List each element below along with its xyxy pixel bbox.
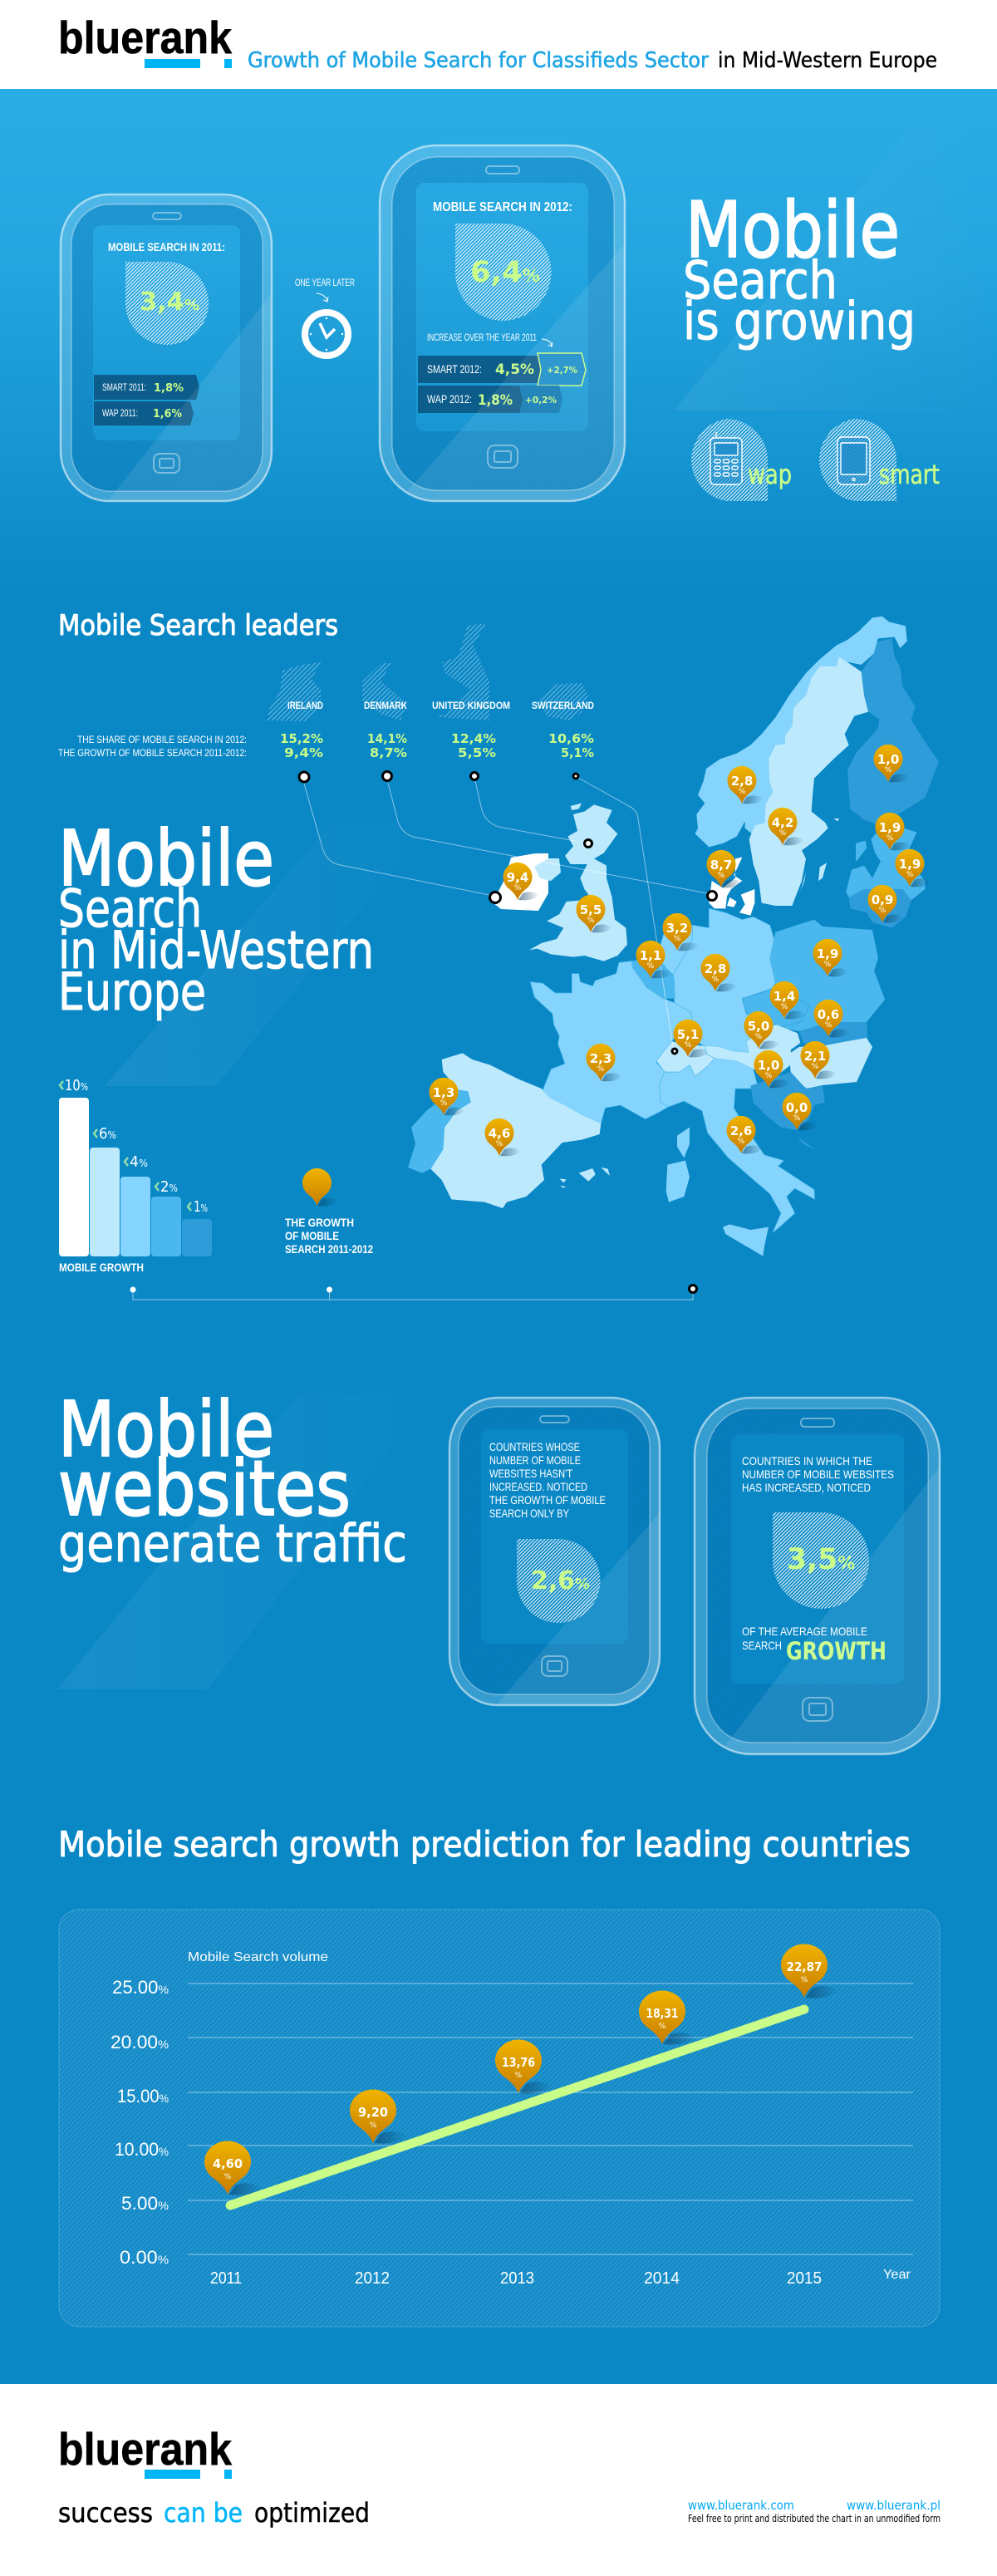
bar: wap 2012: WAP 2012: — [427, 392, 472, 406]
pin 5,5 UK — [577, 895, 612, 932]
bar 6% — [90, 1125, 120, 1256]
pin 4,60: % — [224, 2173, 232, 2181]
pin 22,87: 22,87 — [786, 1959, 823, 1974]
phone text: HAS INCREASED, NOTICED — [742, 1481, 871, 1494]
phone text bottom: OF THE AVERAGE MOBILE — [742, 1625, 867, 1638]
pin 1,0 Hungary: 1,0 — [758, 1058, 779, 1073]
heading: Mobile Search is growing: is growing — [683, 291, 916, 351]
pin 9,4 Ireland: % — [514, 884, 522, 892]
bar 1%: 1% — [194, 1198, 208, 1216]
pin 1,9 Latvia — [896, 849, 931, 887]
x axis labels: 2013 — [500, 2269, 534, 2288]
phone text bottom — [742, 1625, 886, 1665]
chart pins — [204, 1944, 839, 2195]
France — [530, 961, 692, 1123]
pin 4,60: 4,60 — [213, 2156, 243, 2171]
Swedish islands — [800, 819, 839, 892]
heading: Mobile Search in Mid-Western Europe: Search — [58, 878, 202, 939]
heading: Mobile Search in Mid-Western Europe — [58, 814, 374, 1022]
Latvia — [846, 858, 925, 900]
pin 0,9 Lithuania — [867, 885, 904, 922]
pin 2,1 Romania — [801, 1041, 837, 1079]
x axis labels: 2014 — [644, 2269, 680, 2288]
pin 1,0 Hungary: % — [765, 1072, 773, 1080]
Norway — [695, 617, 907, 847]
pin 1,1 Belgium: 1,1 — [640, 948, 661, 963]
values: Ireland: 15,2% — [280, 731, 323, 746]
pin 0,9 Lithuania: % — [879, 907, 886, 915]
pin 2,8 Germany: % — [712, 976, 720, 984]
heading: MOBILE SEARCH IN 2011: — [108, 240, 225, 253]
country names — [287, 700, 594, 711]
icon: smartphone — [837, 437, 870, 484]
pin 9,20: 9,20 — [358, 2105, 388, 2120]
bar: wap 2012: 1,8% — [478, 392, 513, 409]
hatched country: Switzerland — [539, 683, 588, 720]
heading: Mobile Search in Mid-Western Europe: in Mid-Western — [58, 920, 374, 981]
phone text: THE GROWTH OF MOBILE — [489, 1493, 606, 1507]
pin 22,87: % — [801, 1976, 808, 1984]
chart title: Mobile Search volume — [188, 1950, 328, 1964]
United Kingdom — [529, 804, 627, 961]
pin 9,20 — [350, 2089, 408, 2144]
sheen on phone — [397, 241, 627, 503]
pin 1,9 Estonia: 1,9 — [879, 820, 901, 835]
phone text: INCREASED. NOTICED — [489, 1480, 587, 1493]
phone text: COUNTRIES WHOSE — [489, 1440, 580, 1453]
pin 5,1 Switzerland: % — [685, 1041, 692, 1050]
values: United Kingdom: 12,4% — [451, 731, 496, 746]
pin 8,7 Denmark: 8,7 — [710, 858, 732, 873]
leader dots — [299, 771, 716, 1054]
links: www.bluerank.com — [688, 2498, 794, 2513]
Poland — [770, 920, 885, 1031]
sheen on phone — [716, 1463, 943, 1757]
tagline: can be — [164, 2497, 243, 2529]
values: Denmark: 8,7% — [370, 745, 407, 760]
pin 0,6 Slovakia: % — [825, 1021, 832, 1030]
values: Switzerland: 10,6% — [548, 731, 594, 746]
Slovakia — [799, 1022, 867, 1045]
phone text: COUNTRIES IN WHICH THE — [742, 1454, 872, 1467]
y axis labels — [111, 1977, 169, 2268]
Romania — [789, 1038, 872, 1089]
value 3,4%: 3,4% — [140, 288, 199, 317]
connector lines: leaders to map — [304, 778, 707, 1047]
x axis labels: 2015 — [787, 2269, 822, 2288]
main title: in Mid-Western Europe — [718, 48, 937, 73]
icon: wap phone — [710, 432, 742, 484]
Northern Ireland — [534, 858, 561, 881]
value 6,4%: 6,4% — [470, 256, 540, 289]
pin 8,7 Denmark — [706, 850, 743, 887]
values: United Kingdom — [451, 731, 496, 760]
Finland — [847, 638, 939, 825]
pin 8,7 Denmark: % — [718, 872, 725, 880]
pin 4,6 Spain: 4,6 — [489, 1126, 510, 1141]
values: Switzerland — [548, 731, 594, 760]
pin 4,2 Sweden — [768, 808, 804, 845]
axis label: MOBILE GROWTH — [59, 1261, 144, 1274]
Sardinia — [666, 1161, 690, 1202]
values: Switzerland: 5,1% — [561, 745, 594, 760]
leaders table — [58, 623, 594, 760]
label smart: smart — [879, 459, 940, 490]
legend text — [285, 1216, 373, 1256]
pin 9,20: % — [370, 2121, 377, 2130]
country names: IRELAND — [287, 700, 323, 711]
pin 4,60 — [204, 2141, 263, 2195]
trend line — [230, 2009, 804, 2205]
heading: MOBILE SEARCH IN 2012: — [433, 200, 572, 214]
phone: no mobile website growth — [449, 1398, 662, 1708]
tagline: optimized — [254, 2497, 370, 2529]
hatched teardrop — [125, 262, 209, 345]
pin 1,4 Czech Republic: % — [781, 1003, 788, 1011]
values: United Kingdom: 5,5% — [458, 745, 496, 760]
logo: bluerank: bluerank — [58, 12, 232, 63]
row labels — [58, 734, 247, 759]
heading: Mobile websites generate traffic: generate traffic — [58, 1513, 407, 1574]
pin 1,3 Portugal: 1,3 — [433, 1085, 454, 1100]
panel: line chart — [59, 1910, 940, 2327]
northern countries — [529, 617, 939, 961]
hatched teardrop — [773, 1512, 869, 1609]
pin 13,76: % — [515, 2072, 523, 2080]
Lithuania — [849, 889, 911, 928]
pin 5,5 UK: 5,5 — [580, 902, 602, 917]
Czech Republic — [742, 989, 810, 1028]
pin 2,6 Italy: % — [738, 1138, 745, 1146]
Denmark — [709, 858, 754, 916]
Switzerland — [656, 1041, 715, 1076]
pin 3,2 Netherlands — [663, 913, 699, 951]
sheen on phone — [106, 293, 274, 503]
bar: wap 2011: 1,6% — [153, 408, 182, 420]
legend text: SEARCH 2011-2012 — [285, 1242, 373, 1256]
pin 22,87 — [781, 1944, 839, 1998]
Scottish islands — [571, 804, 582, 810]
pin 9,4 Ireland: 9,4 — [507, 870, 528, 885]
legend pin: growth of mobile search — [285, 1168, 373, 1256]
phone text bottom: GROWTH — [786, 1637, 886, 1665]
pin 2,6 Italy — [726, 1116, 763, 1153]
pin 2,8 Germany — [701, 954, 737, 991]
legend text: THE GROWTH — [285, 1216, 354, 1229]
country names: SWITZERLAND — [532, 700, 594, 711]
pin 4,2 Sweden: 4,2 — [772, 815, 793, 830]
row labels: THE GROWTH OF MOBILE SEARCH 2011-2012: — [58, 747, 247, 759]
pin 0,6 Slovakia — [814, 1000, 850, 1037]
phone text: NUMBER OF MOBILE WEBSITES — [742, 1467, 894, 1481]
pin 3,2 Netherlands: 3,2 — [666, 921, 688, 936]
y axis labels: 25.00% — [112, 1977, 169, 1998]
pin 5,0 Austria: 5,0 — [748, 1019, 769, 1034]
bar 2% — [151, 1178, 181, 1256]
x axis labels: 2012 — [355, 2269, 390, 2288]
pin 5,1 Switzerland: 5,1 — [677, 1027, 699, 1042]
bar: smart 2012: +2,7% — [547, 365, 577, 376]
phone text bottom: SEARCH — [742, 1639, 782, 1652]
bar 4%: 4% — [130, 1153, 148, 1171]
increase label: INCREASE OVER THE YEAR 2011 — [427, 332, 537, 343]
tagline: success — [58, 2497, 153, 2529]
pin 5,0 Austria — [744, 1011, 780, 1049]
sheen: section 3 — [57, 1394, 432, 1689]
pin 1,1 Belgium: % — [647, 962, 655, 971]
heading: Mobile Search is growing — [683, 185, 916, 351]
pin 2,3 France: % — [597, 1065, 605, 1074]
pin 1,9 Estonia — [876, 813, 911, 850]
pin 1,4 Czech Republic: 1,4 — [774, 989, 795, 1004]
pin 1,9 Latvia: 1,9 — [899, 857, 921, 872]
pin 1,3 Portugal — [429, 1078, 465, 1115]
pin 13,76 — [495, 2039, 553, 2094]
row labels: THE SHARE OF MOBILE SEARCH IN 2012: — [77, 734, 247, 745]
phone text: WEBSITES HASN'T — [489, 1467, 572, 1480]
Corsica — [677, 1128, 690, 1158]
pin 1,0 Hungary — [754, 1050, 790, 1088]
legend: smart — [819, 419, 940, 501]
arrow: one year later — [317, 293, 328, 302]
pin 0,0 Greece: % — [793, 1114, 801, 1123]
heading: Mobile websites generate traffic — [58, 1385, 407, 1574]
x axis labels: 2011 — [210, 2269, 242, 2288]
phone text: NUMBER OF MOBILE — [489, 1453, 581, 1467]
hatched country: Ireland — [267, 662, 321, 721]
bar: wap 2011 — [94, 401, 194, 425]
phone: mobile search in 2012 — [380, 145, 627, 503]
Balkans and Greece — [750, 1072, 825, 1149]
heading: growth prediction: Mobile search growth prediction for leading countries — [58, 1824, 911, 1865]
heading: Mobile Search is growing: Search — [683, 250, 837, 311]
Netherlands — [656, 925, 692, 975]
bar: smart 2011: 1,8% — [154, 382, 184, 395]
footer — [0, 2384, 997, 2576]
Germany — [673, 908, 775, 1053]
sheen: heading section 1 — [674, 129, 997, 410]
bar 1% — [182, 1198, 212, 1256]
main title: Growth of Mobile Search for Classifieds Sector — [248, 48, 709, 73]
pin 1,0 Finland — [874, 745, 910, 782]
hatched country: United Kingdom — [439, 623, 489, 720]
bar: wap 2012 — [418, 386, 562, 413]
tagline — [58, 2497, 370, 2529]
bar: smart 2012 — [418, 353, 586, 386]
pin 1,0 Finland: 1,0 — [877, 752, 899, 767]
one year later label: ONE YEAR LATER — [295, 277, 355, 288]
links: www.bluerank.pl — [847, 2498, 941, 2513]
bar 10%: 10% — [65, 1077, 88, 1094]
pin 0,0 Greece: 0,0 — [786, 1100, 808, 1115]
phone text — [742, 1454, 894, 1494]
y axis labels: 20.00% — [111, 2032, 169, 2052]
values: Denmark — [367, 731, 407, 760]
pin 2,8 Norway — [728, 766, 764, 804]
y axis labels: 5.00% — [121, 2193, 169, 2214]
hatched teardrop — [455, 224, 552, 321]
pin 3,2 Netherlands: % — [674, 935, 681, 943]
bar: smart 2011 — [94, 375, 199, 400]
pin 1,3 Portugal: % — [440, 1099, 448, 1108]
y axis labels: 15.00% — [117, 2086, 169, 2107]
pin 4,6 Spain: % — [496, 1140, 503, 1148]
Belgium — [631, 956, 675, 999]
hatched teardrop — [517, 1539, 600, 1623]
values: Denmark: 14,1% — [367, 731, 407, 746]
map pins — [429, 745, 931, 1156]
pin 0,0 Greece — [783, 1093, 818, 1130]
Sicily — [723, 1224, 769, 1256]
pin 5,1 Switzerland — [673, 1020, 710, 1057]
pin 4,2 Sweden: % — [779, 829, 787, 838]
bar: wap 2012: +0,2% — [525, 395, 557, 406]
Austria and Hungary — [705, 1025, 800, 1074]
Estonia — [856, 828, 916, 862]
x axis labels — [210, 2268, 911, 2288]
Spain — [430, 1053, 601, 1208]
pin 1,9 Poland: 1,9 — [817, 946, 838, 961]
pin 2,6 Italy: 2,6 — [730, 1123, 752, 1138]
pin 1,9 Latvia: % — [906, 871, 914, 879]
links — [688, 2498, 941, 2513]
pin 5,0 Austria: % — [755, 1033, 763, 1041]
bar: wap 2011: WAP 2011: — [102, 407, 138, 419]
pin 2,1 Romania: % — [812, 1063, 819, 1071]
y axis labels: 0.00% — [120, 2247, 169, 2268]
pin 4,6 Spain — [485, 1118, 521, 1156]
bar 10% — [59, 1077, 89, 1256]
hatched country: Denmark — [362, 663, 407, 720]
bar: smart 2012: SMART 2012: — [427, 362, 482, 376]
sheen: section 2 — [105, 823, 432, 1086]
Portugal — [408, 1090, 471, 1173]
bar 6%: 6% — [99, 1125, 116, 1143]
pin 13,76: 13,76 — [502, 2055, 535, 2070]
pin 1,4 Czech Republic — [769, 981, 806, 1019]
phone text: SEARCH ONLY BY — [489, 1507, 570, 1520]
value 2,6%: 2,6% — [531, 1566, 590, 1595]
sheen on phone — [494, 1512, 662, 1708]
heading: Mobile Search is growing: Mobile — [685, 185, 900, 275]
pin 0,6 Slovakia: 0,6 — [818, 1007, 839, 1022]
header — [58, 12, 937, 73]
arrow: increase — [542, 339, 553, 347]
pin 1,9 Poland: % — [824, 961, 832, 969]
map of Europe — [408, 617, 939, 1256]
Sweden — [749, 656, 868, 906]
pin 2,8 Germany: 2,8 — [705, 961, 726, 976]
x axis labels: Year — [883, 2268, 911, 2282]
label wap: wap — [748, 459, 792, 490]
phone: mobile website growth — [695, 1398, 943, 1757]
country names: UNITED KINGDOM — [432, 700, 510, 711]
pin 18,31: 18,31 — [646, 2006, 678, 2021]
bar 4% — [120, 1153, 150, 1256]
Ireland — [493, 853, 548, 911]
phone: mobile search in 2011 — [61, 194, 274, 503]
pin 1,1 Belgium — [636, 941, 672, 978]
heading: Mobile websites generate traffic: websites — [58, 1444, 351, 1533]
icon: clock — [305, 312, 348, 356]
pin 18,31: % — [659, 2023, 666, 2031]
bar chart: mobile growth — [59, 1077, 212, 1274]
heading: Mobile Search leaders: Mobile Search leaders — [58, 609, 338, 642]
bar: smart 2012: 4,5% — [495, 361, 534, 378]
pin 2,8 Norway: % — [739, 788, 746, 796]
heading: Mobile Search in Mid-Western Europe: Mobile — [58, 814, 274, 903]
heading: Mobile Search in Mid-Western Europe: Europe — [58, 961, 206, 1022]
pin 1,9 Estonia: % — [886, 834, 894, 843]
country names: DENMARK — [364, 700, 407, 711]
pin 1,0 Finland: % — [885, 766, 892, 774]
pin 5,5 UK: % — [587, 917, 595, 925]
pin 2,8 Norway: 2,8 — [731, 774, 753, 789]
values: Ireland: 9,4% — [284, 745, 324, 760]
footer logo: bluerank — [58, 2423, 232, 2475]
values: Ireland — [280, 731, 324, 760]
y axis labels: 10.00% — [115, 2139, 169, 2160]
legend text: OF MOBILE — [285, 1229, 339, 1242]
pin 2,1 Romania: 2,1 — [804, 1049, 826, 1064]
phone text — [489, 1440, 606, 1520]
pin 2,3 France: 2,3 — [590, 1051, 611, 1066]
pin 18,31 — [639, 1990, 697, 2045]
value 3,5%: 3,5% — [787, 1543, 855, 1576]
legend: wap — [691, 419, 792, 501]
pin 0,9 Lithuania: 0,9 — [872, 892, 893, 907]
continental countries — [408, 908, 885, 1256]
connector: legend line — [130, 1285, 696, 1300]
pin 1,9 Poland — [813, 939, 849, 976]
pin 2,3 France — [587, 1044, 622, 1081]
bar: smart 2011: SMART 2011: — [102, 381, 146, 393]
heading: Mobile websites generate traffic: Mobile — [58, 1385, 274, 1474]
bar 2%: 2% — [160, 1178, 178, 1196]
Balearic islands — [559, 1168, 610, 1187]
Italy — [659, 1058, 815, 1232]
pin 9,4 Ireland — [503, 863, 539, 900]
